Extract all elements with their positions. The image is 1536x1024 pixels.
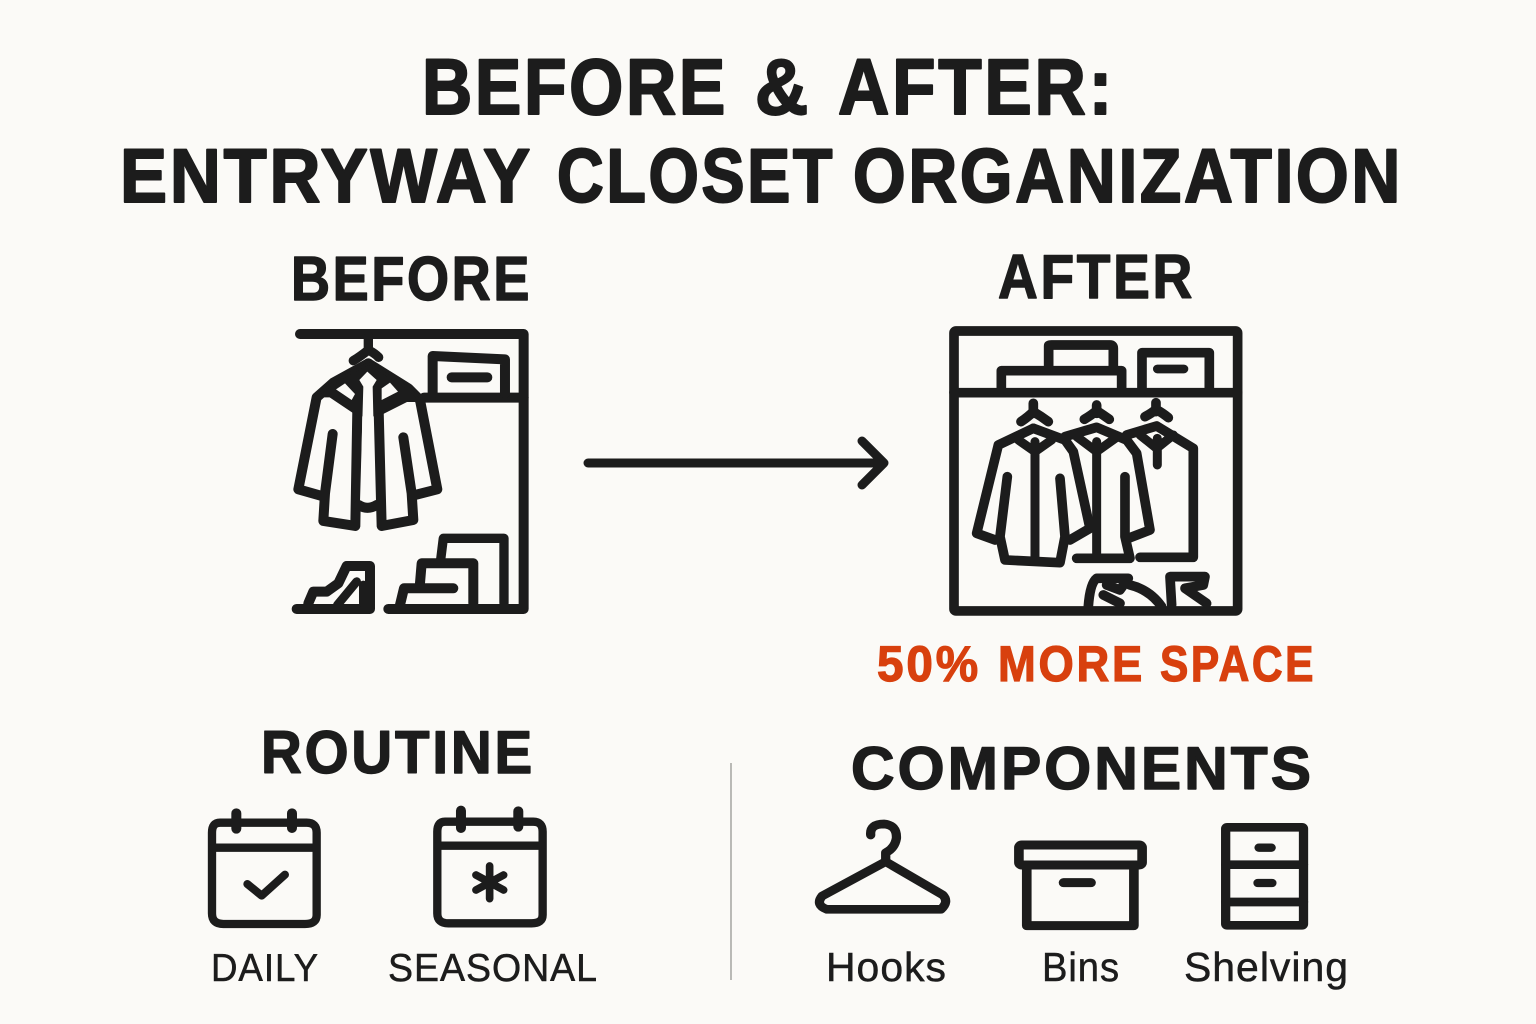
title: & <box>755 42 811 131</box>
heading: after: AFTER <box>998 243 1195 312</box>
heading: before: BEFORE <box>291 245 532 314</box>
icon: cluttered closet before <box>297 334 524 609</box>
title: ENTRYWAY <box>120 134 533 219</box>
callout: 50% more space: 50% <box>877 636 981 692</box>
icon: hanger <box>819 824 946 909</box>
icon: organized closet after <box>954 331 1238 611</box>
title: AFTER: <box>838 42 1115 131</box>
divider <box>730 763 732 980</box>
title: ORGANIZATION <box>853 134 1403 219</box>
title: CLOSET <box>557 134 835 219</box>
icon: seasonal calendar <box>437 811 543 923</box>
label: daily: DAILY <box>211 947 319 990</box>
heading: routine: ROUTINE <box>261 719 535 786</box>
label: seasonal: SEASONAL <box>388 947 598 990</box>
title: BEFORE <box>422 42 728 131</box>
label: shelving: Shelving <box>1184 944 1349 990</box>
label: bins: Bins <box>1042 944 1120 990</box>
label: hooks: Hooks <box>826 944 947 990</box>
callout: 50% more space: MORE <box>998 636 1145 692</box>
callout: 50% more space: SPACE <box>1160 636 1316 692</box>
icon: shelving <box>1226 827 1304 925</box>
title <box>120 42 1403 219</box>
arrow: before to after <box>588 441 884 485</box>
heading: components: COMPONENTS <box>851 735 1314 802</box>
icon: bin <box>1019 845 1142 926</box>
callout: 50% more space <box>877 636 1316 692</box>
icon: daily calendar <box>212 813 317 924</box>
